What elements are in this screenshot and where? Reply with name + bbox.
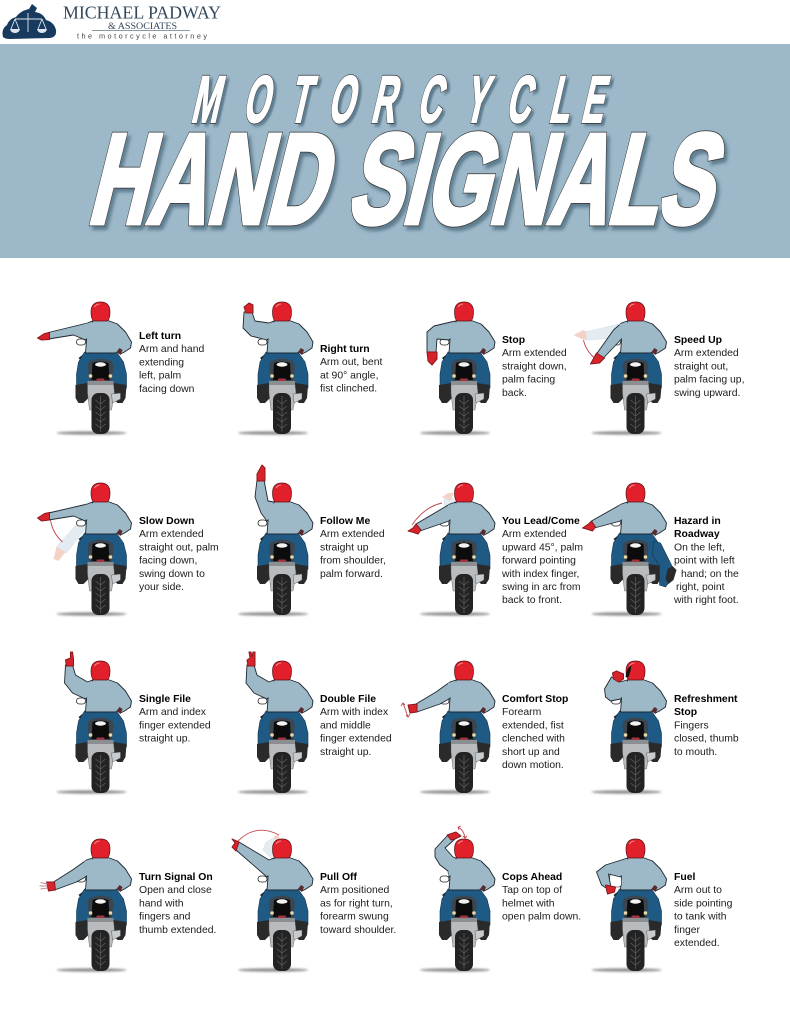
caption: turn signal on: hand with	[139, 898, 184, 909]
caption: refreshment stop: Refreshment	[674, 694, 738, 705]
caption: left turn: extending	[139, 357, 184, 368]
caption: stop: palm facing	[502, 375, 555, 386]
caption: comfort stop: Comfort Stop	[502, 694, 568, 705]
caption: follow me: palm forward.	[320, 569, 383, 580]
rider: stop	[420, 302, 495, 435]
caption: you lead / come: upward 45°, palm	[502, 542, 583, 553]
caption: slow down: your side.	[139, 582, 184, 593]
rider: fuel	[592, 839, 666, 972]
logo name: MICHAEL PADWAY	[63, 2, 221, 22]
caption: double file: and middle	[320, 720, 371, 731]
caption: fuel: to tank with	[674, 912, 727, 923]
caption: fuel: side pointing	[674, 898, 733, 909]
caption: turn signal on: Open and close	[139, 885, 212, 896]
caption: follow me: from shoulder,	[320, 556, 386, 567]
panel: comfort stop	[401, 661, 568, 794]
caption: comfort stop: clenched with	[502, 734, 565, 745]
caption: pull off: forearm swung	[320, 912, 389, 923]
rider: left turn	[38, 302, 132, 435]
caption: hazard in roadway: with right foot.	[673, 595, 739, 606]
motion arrow	[401, 703, 410, 717]
open fingers	[40, 882, 48, 889]
caption: hazard in roadway: Hazard in	[674, 516, 721, 527]
caption: you lead / come: You Lead/Come	[502, 516, 580, 527]
caption: follow me: Follow Me	[320, 516, 370, 527]
icon: motorcycle with scales of justice	[2, 4, 56, 39]
rider: single file	[56, 652, 132, 794]
title: Motorcycle: MOTORCYCLE	[187, 64, 615, 137]
caption: comfort stop: short up and	[502, 747, 560, 758]
caption: speed up: Arm extended	[674, 348, 739, 359]
caption: right turn: fist clinched.	[320, 384, 377, 395]
title: Motorcycle: MOTORCYCLE	[187, 64, 615, 137]
panel: single file	[56, 652, 211, 794]
caption: follow me: straight up	[320, 542, 369, 553]
caption: fuel: Arm out to	[674, 885, 722, 896]
caption: double file: Arm with index	[320, 707, 389, 718]
title banner	[0, 44, 790, 258]
caption: slow down: Arm extended	[139, 529, 204, 540]
caption: right turn: Right turn	[320, 344, 370, 355]
rider: refreshment stop	[592, 661, 666, 794]
ghost arm	[574, 324, 620, 358]
panel: stop	[420, 302, 567, 435]
caption: cops ahead: open palm down.	[502, 912, 581, 923]
caption: single file: finger extended	[139, 720, 211, 731]
caption: left turn: left, palm	[139, 371, 181, 382]
logo associates: & ASSOCIATES	[108, 22, 177, 32]
caption: slow down: swing down to	[139, 569, 205, 580]
rider: follow me	[238, 465, 313, 616]
ghost arm	[412, 493, 456, 525]
rider: hazard in roadway	[582, 483, 676, 616]
caption: double file: Double File	[320, 694, 376, 705]
caption: hazard in roadway: On the left,	[674, 542, 725, 553]
caption: speed up: straight out,	[674, 361, 728, 372]
caption: comfort stop: down motion.	[502, 760, 564, 771]
caption: slow down: Slow Down	[139, 516, 194, 527]
panel: cops ahead	[420, 826, 581, 972]
caption: refreshment stop: to mouth.	[674, 747, 717, 758]
caption: fuel: Fuel	[674, 872, 695, 883]
panel: hazard in roadway	[582, 483, 739, 616]
panel: refreshment stop	[592, 661, 739, 794]
panel: speed up	[574, 302, 744, 435]
panel: double file	[238, 652, 392, 794]
caption: refreshment stop: Fingers	[674, 720, 709, 731]
panel: pull off	[232, 830, 396, 972]
motion arrow	[458, 826, 467, 838]
caption: speed up: swing upward.	[674, 388, 740, 399]
caption: pull off: as for right turn,	[320, 898, 393, 909]
caption: speed up: palm facing up,	[674, 375, 744, 386]
caption: single file: Single File	[139, 694, 191, 705]
caption: you lead / come: Arm extended	[502, 529, 567, 540]
rider: double file	[238, 652, 313, 794]
caption: cops ahead: Cops Ahead	[502, 872, 562, 883]
rider: cops ahead	[420, 826, 495, 972]
caption: pull off: Pull Off	[320, 872, 357, 883]
rider: slow down	[38, 483, 132, 616]
caption: you lead / come: swing in arc from	[502, 582, 581, 593]
caption: comfort stop: extended, fist	[502, 720, 564, 731]
rider: you lead / come	[408, 483, 495, 616]
rider: speed up	[574, 302, 666, 435]
caption: cops ahead: helmet with	[502, 898, 555, 909]
rider: comfort stop	[401, 661, 495, 794]
caption: hazard in roadway: right, point	[676, 582, 725, 593]
caption: hazard in roadway: point with left	[674, 556, 735, 567]
caption: fuel: extended.	[674, 938, 720, 949]
caption: cops ahead: Tap on top of	[502, 885, 562, 896]
caption: turn signal on: thumb extended.	[139, 925, 216, 936]
caption: single file: Arm and index	[139, 707, 207, 718]
ghost arm	[238, 830, 280, 860]
caption: slow down: facing down,	[139, 556, 197, 567]
caption: hazard in roadway: hand; on the	[681, 569, 739, 580]
rider: right turn	[238, 302, 313, 435]
caption: stop: straight down,	[502, 361, 567, 372]
caption: right turn: Arm out, bent	[320, 357, 382, 368]
caption: speed up: Speed Up	[674, 335, 722, 346]
extended leg	[652, 541, 676, 587]
ghost arm	[50, 515, 86, 561]
rider: turn signal on	[40, 839, 132, 972]
panel: slow down	[38, 483, 219, 616]
caption: follow me: Arm extended	[320, 529, 385, 540]
caption: fuel: finger	[674, 925, 701, 936]
caption: left turn: Left turn	[139, 331, 181, 342]
caption: you lead / come: forward pointing	[502, 556, 576, 567]
caption: double file: straight up.	[320, 747, 371, 758]
caption: you lead / come: with index finger,	[501, 569, 579, 580]
caption: refreshment stop: Stop	[674, 707, 697, 718]
caption: stop: Arm extended	[502, 348, 567, 359]
caption: refreshment stop: closed, thumb	[674, 734, 739, 745]
panel: turn signal on	[40, 839, 216, 972]
panel: right turn	[238, 302, 382, 435]
caption: single file: straight up.	[139, 734, 190, 745]
logo tagline: the motorcycle attorney	[77, 32, 207, 40]
logo: Michael Padway & Associates	[2, 2, 221, 40]
panel: you lead / come	[408, 483, 583, 616]
caption: you lead / come: back to front.	[502, 595, 562, 606]
caption: stop: Stop	[502, 335, 525, 346]
title: Motorcycle: MOTORCYCLE	[190, 67, 618, 140]
caption: stop: back.	[502, 388, 527, 399]
panel: follow me	[238, 465, 386, 616]
caption: left turn: facing down	[139, 384, 195, 395]
caption: right turn: at 90° angle,	[320, 370, 378, 381]
caption: hazard in roadway: Roadway	[674, 529, 720, 540]
caption: double file: finger extended	[320, 734, 392, 745]
panel: fuel	[592, 839, 733, 972]
panel: left turn	[38, 302, 204, 435]
caption: pull off: toward shoulder.	[320, 925, 396, 936]
caption: left turn: Arm and hand	[139, 344, 204, 355]
rider: pull off	[232, 830, 313, 972]
caption: turn signal on: fingers and	[139, 912, 191, 923]
caption: slow down: straight out, palm	[139, 542, 219, 553]
caption: comfort stop: Forearm	[502, 707, 541, 718]
caption: turn signal on: Turn Signal On	[139, 872, 213, 883]
caption: pull off: Arm positioned	[320, 885, 390, 896]
